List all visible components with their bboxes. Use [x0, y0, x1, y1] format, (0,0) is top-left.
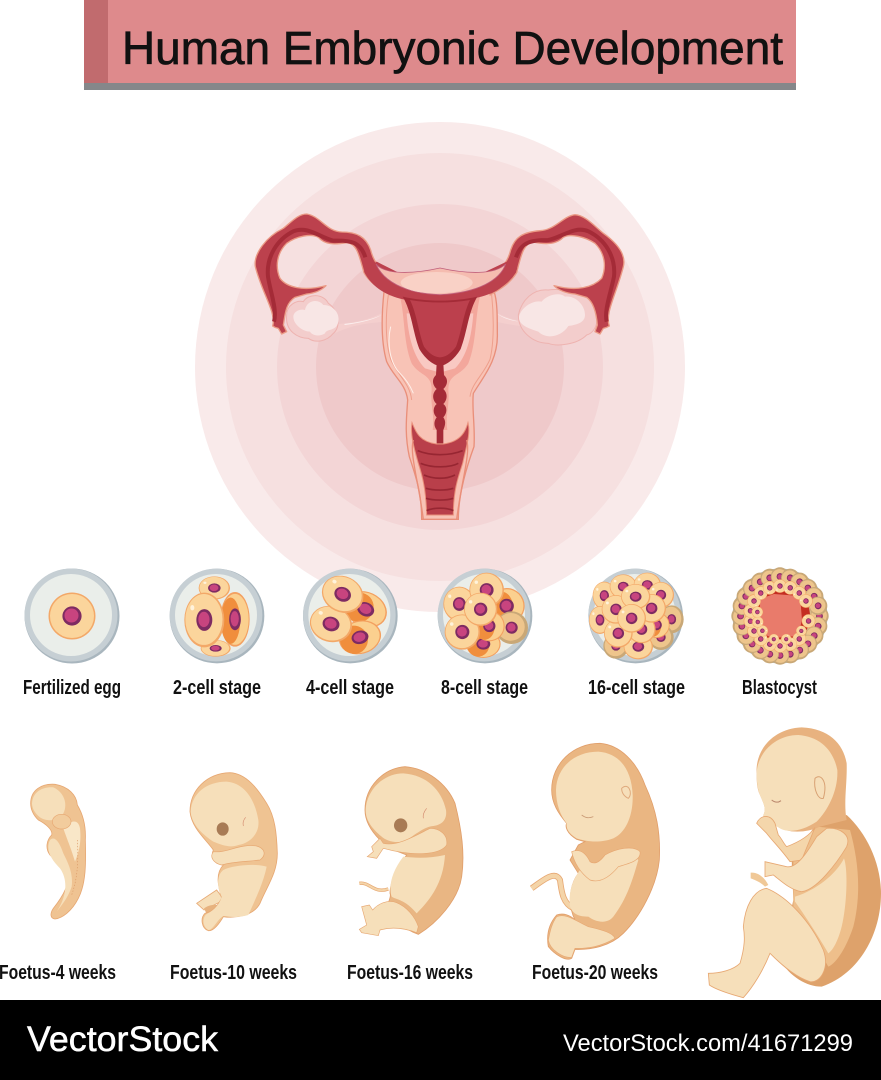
endometrial pale band: [407, 313, 473, 372]
fundus pale top: [376, 264, 506, 295]
inner muscular layer: [400, 297, 480, 430]
vagina: [411, 423, 469, 519]
uterine wall and vagina outline: [382, 292, 497, 519]
concentric background circles: [195, 122, 685, 612]
cervical canal: [433, 363, 447, 443]
image reference url: VectorStock.com/41671299: [563, 1030, 853, 1057]
foetus labels: [0, 962, 658, 984]
left fallopian tube: [255, 214, 390, 334]
cell: 2-cell stage: [170, 569, 264, 663]
cell stage labels: 16-cell stage: [588, 677, 685, 699]
embryo: 16 weeks: [359, 767, 463, 936]
footer watermark bar: [0, 1000, 881, 1080]
full-term foetus: [708, 727, 881, 998]
cell: 4-cell stage: [303, 569, 398, 663]
brand name: VectorStock: [27, 1020, 219, 1059]
cell: 16-cell stage: [588, 569, 684, 663]
embryo: 10 weeks: [190, 773, 277, 931]
title text: Human Embryonic Development: [122, 22, 783, 74]
cell: fertilized egg: [24, 568, 120, 664]
cell stage labels: 2-cell stage: [173, 677, 261, 699]
cell: blastocyst: [731, 567, 829, 665]
right ovary: [495, 290, 597, 345]
foetus labels: Foetus-4 weeks: [0, 962, 116, 984]
cell stage labels: Fertilized egg: [23, 677, 121, 699]
cell stage labels: [23, 677, 817, 699]
title banner: [84, 0, 796, 90]
embryo: 20 weeks: [532, 743, 660, 959]
highlight strokes: [389, 327, 413, 393]
foetus labels: Foetus-10 weeks: [170, 962, 297, 984]
fundus band and uterine cavity: [364, 262, 517, 302]
cell stage labels: Blastocyst: [742, 677, 817, 699]
right fallopian tube: [490, 215, 624, 334]
cell: 8-cell stage: [438, 569, 532, 663]
foetus labels: Foetus-20 weeks: [532, 962, 658, 984]
inner wall line: [386, 295, 493, 400]
left ovary: [287, 296, 384, 341]
cell stages row: [24, 567, 829, 665]
foetus labels: Foetus-16 weeks: [347, 962, 473, 984]
uterus illustration: [255, 214, 624, 519]
embryo: 4 weeks: [31, 784, 86, 919]
cell stage labels: 4-cell stage: [306, 677, 394, 699]
cell stage labels: 8-cell stage: [441, 677, 528, 699]
